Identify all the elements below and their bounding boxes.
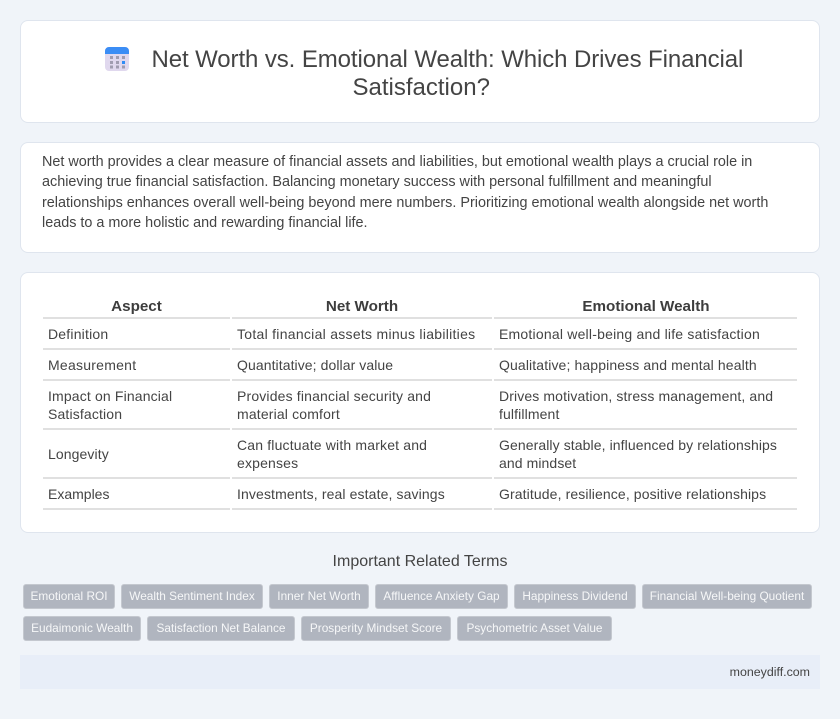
row: definition: Emotional well-being and life satisfaction <box>499 326 760 342</box>
title: Net Worth vs. Emotional Wealth: Which Drives Financial <box>152 46 743 73</box>
related terms tags <box>23 584 812 641</box>
row: longevity: Generally stable, influenced by relationships <box>499 437 777 453</box>
intro text: Net worth provides a clear measure of financial assets and liabilities, but emotional wealth plays a crucial role in <box>42 154 752 170</box>
related terms tags: Wealth Sentiment Index <box>129 589 255 603</box>
footer <box>20 655 820 689</box>
title: Satisfaction? <box>352 74 490 101</box>
row: impact: fulfillment <box>499 406 559 422</box>
footer source: moneydiff.com <box>730 665 810 679</box>
intro text: relationships enhances overall well-being beyond mere numbers. Prioritizing emotional wealth alongside net worth <box>42 195 768 211</box>
table headers: Emotional Wealth <box>582 298 710 315</box>
row: longevity: Longevity <box>48 446 109 462</box>
row: measurement: Measurement <box>48 357 136 373</box>
icon: calendar <box>105 47 129 71</box>
table headers <box>111 298 710 315</box>
row: definition: Total financial assets minus liabilities <box>237 326 475 342</box>
row: examples: Gratitude, resilience, positive relationships <box>499 486 766 502</box>
related terms tags: Psychometric Asset Value <box>466 621 603 635</box>
intro text: leads to a more holistic and rewarding financial life. <box>42 215 368 231</box>
row: impact: material comfort <box>237 406 340 422</box>
row: measurement: Quantitative; dollar value <box>237 357 393 373</box>
related terms tags: Eudaimonic Wealth <box>31 621 133 635</box>
panel: introduction <box>20 142 820 253</box>
panel: header <box>20 20 820 123</box>
related terms tags: Happiness Dividend <box>522 589 628 603</box>
row: longevity: expenses <box>237 455 298 471</box>
row: definition <box>48 326 760 342</box>
table headers: Aspect <box>111 298 162 315</box>
row: measurement: Qualitative; happiness and mental health <box>499 357 757 373</box>
row: impact: Satisfaction <box>48 406 122 422</box>
intro text <box>42 154 768 231</box>
table headers: Net Worth <box>326 298 398 315</box>
row: impact <box>48 388 773 422</box>
row: examples: Investments, real estate, savings <box>237 486 445 502</box>
row: longevity <box>48 437 777 471</box>
related terms tags: Financial Well-being Quotient <box>650 589 804 603</box>
panel: comparison table <box>20 272 820 533</box>
row: examples: Examples <box>48 486 109 502</box>
related terms tags: Emotional ROI <box>30 589 108 603</box>
row: longevity: Can fluctuate with market and <box>237 437 427 453</box>
row: definition: Definition <box>48 326 108 342</box>
row: examples <box>48 486 766 502</box>
row: longevity: and mindset <box>499 455 576 471</box>
row: measurement <box>48 357 757 373</box>
row: impact: Drives motivation, stress management, and <box>499 388 773 404</box>
intro text: achieving true financial satisfaction. Balancing monetary success with personal fulfillment and meaningful <box>42 174 712 190</box>
title <box>152 46 743 101</box>
related terms tags: Inner Net Worth <box>277 589 361 603</box>
related terms tags: Affluence Anxiety Gap <box>383 589 500 603</box>
row: impact: Provides financial security and <box>237 388 431 404</box>
related terms tags: Satisfaction Net Balance <box>156 621 286 635</box>
related terms tags: Prosperity Mindset Score <box>310 621 442 635</box>
heading: related terms: Important Related Terms <box>333 553 507 570</box>
row: impact: Impact on Financial <box>48 388 172 404</box>
